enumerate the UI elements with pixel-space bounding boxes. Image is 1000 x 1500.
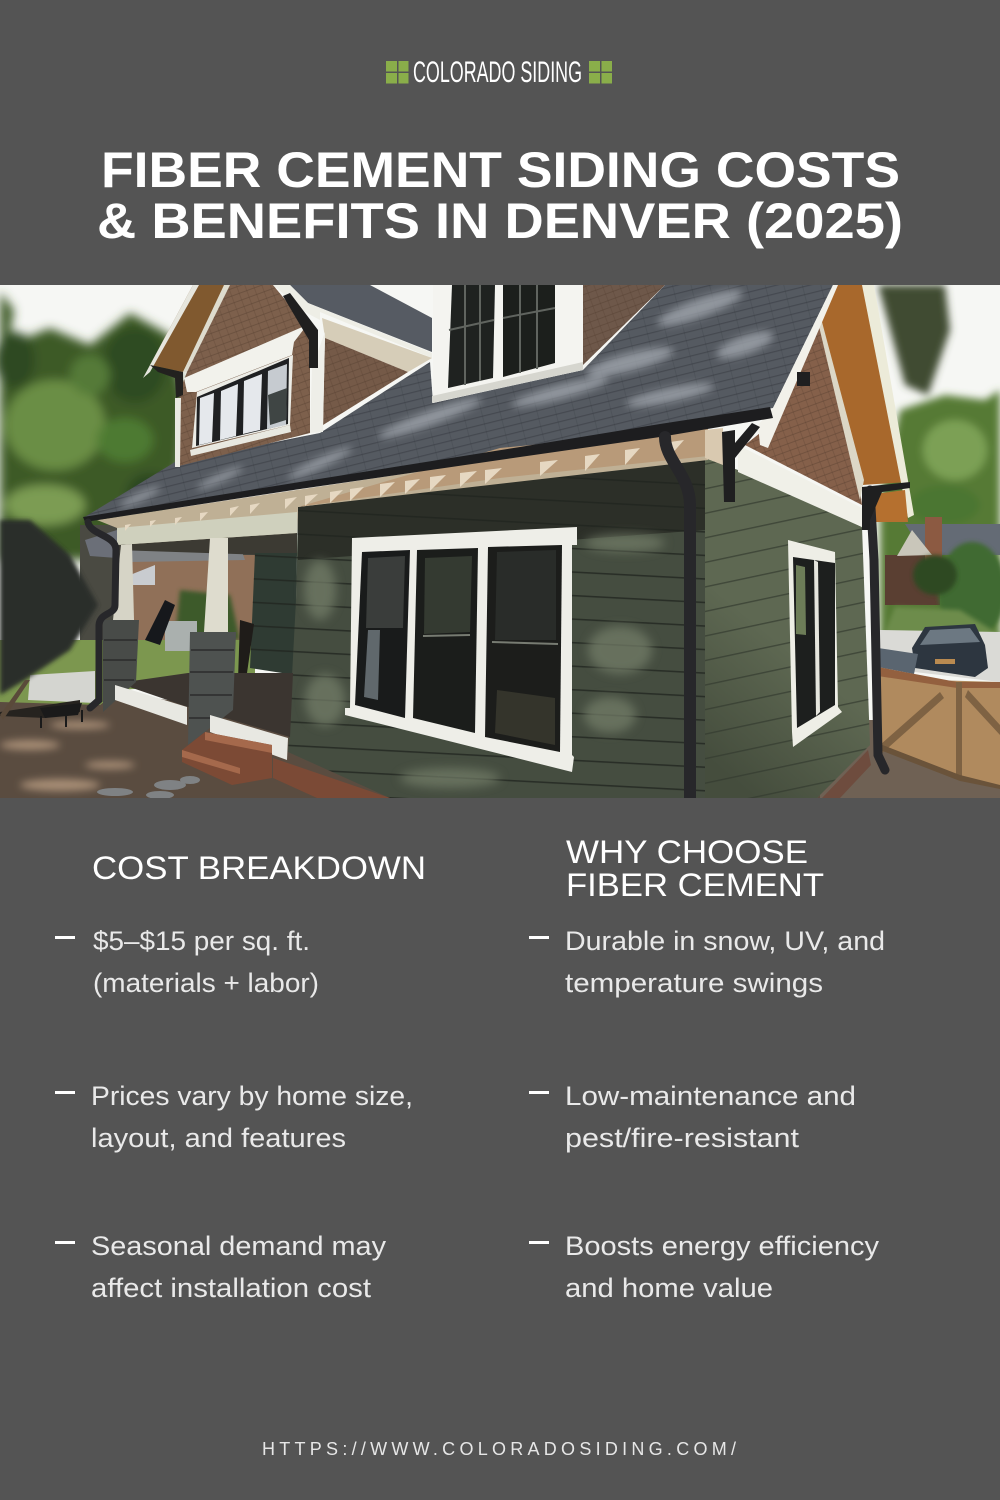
left dark bush <box>0 520 98 720</box>
cost bullet 1: (materials + labor) <box>93 968 319 998</box>
title: FIBER CEMENT SIDING COSTS <box>101 142 900 198</box>
cost bullet 3: affect installation cost <box>91 1273 372 1303</box>
icon: right green window <box>589 61 612 84</box>
gable orange soffit and rakes <box>758 285 914 522</box>
timber brackets <box>722 372 910 530</box>
heading: Why Choose Fiber Cement <box>566 834 824 903</box>
benefit bullet 2: Low-maintenance and <box>565 1081 856 1111</box>
upper small roof <box>273 285 432 433</box>
cost bullet 1 <box>55 926 319 998</box>
cost bullet 2: Prices vary by home size, <box>91 1081 413 1111</box>
main lower wall, right face <box>705 458 870 798</box>
gable shingle wall <box>745 325 862 505</box>
logo: Colorado Siding <box>386 56 612 89</box>
main lower wall, left face <box>288 458 705 798</box>
porch deck <box>118 673 293 737</box>
heading: Why Choose Fiber Cement: FIBER CEMENT <box>566 867 824 903</box>
cost bullet 3: Seasonal demand may <box>91 1231 387 1261</box>
benefit bullet 3 <box>529 1231 880 1303</box>
benefit bullet 2 <box>529 1081 856 1153</box>
footer url: HTTPS://WWW.COLORADOSIDING.COM/ <box>262 1439 736 1459</box>
yard details <box>0 671 200 799</box>
cost bullet 3 <box>55 1231 387 1303</box>
wooden fence <box>878 667 1000 789</box>
background house and shrubs on right <box>880 517 1000 682</box>
title: & BENEFITS IN DENVER (2025) <box>97 193 903 249</box>
heading: Cost Breakdown: COST BREAKDOWN <box>92 850 426 886</box>
porch background brick house <box>80 525 260 645</box>
cost bullet 1: $5–$15 per sq. ft. <box>93 926 310 956</box>
heading: Why Choose Fiber Cement: WHY CHOOSE <box>566 834 808 870</box>
benefit bullet 3: and home value <box>565 1273 773 1303</box>
cost bullet 2: layout, and features <box>91 1123 346 1153</box>
brick steps <box>182 732 272 785</box>
title <box>97 142 903 249</box>
benefit bullet 3: Boosts energy efficiency <box>565 1231 880 1261</box>
photo: craftsman house with green fiber cement siding <box>0 284 1000 800</box>
brick foundation <box>273 750 871 798</box>
side window <box>788 540 842 747</box>
left trees <box>0 292 185 560</box>
porch white skirt boards <box>115 685 288 760</box>
benefit bullet 1: Durable in snow, UV, and <box>565 926 885 956</box>
right background trees and sky <box>878 285 1000 640</box>
cost bullet 2 <box>55 1081 413 1153</box>
main roof shingles <box>83 284 833 518</box>
white belly band <box>738 445 862 527</box>
benefit bullet 2: pest/fire-resistant <box>565 1123 800 1153</box>
upper gable at left: soffit, shingle wall, roof <box>143 285 310 467</box>
lawn <box>0 640 255 705</box>
car <box>878 624 988 677</box>
ground at right <box>820 720 1000 798</box>
air conditioner and grill cover <box>145 600 197 651</box>
icon: left green window <box>386 61 408 84</box>
gutter <box>83 407 773 522</box>
upper right dormer <box>432 285 665 403</box>
logo wordmark: COLORADO SIDING <box>413 56 582 89</box>
downspouts <box>88 437 885 800</box>
upper left window <box>190 355 293 456</box>
big front window <box>345 527 577 772</box>
benefit bullet 1 <box>529 926 885 998</box>
ground base <box>0 698 820 798</box>
porch columns and stone piers <box>103 538 236 745</box>
benefit bullet 1: temperature swings <box>565 968 823 998</box>
eave cream fascia with rafter tails <box>97 428 723 545</box>
porch recess siding <box>117 532 297 680</box>
